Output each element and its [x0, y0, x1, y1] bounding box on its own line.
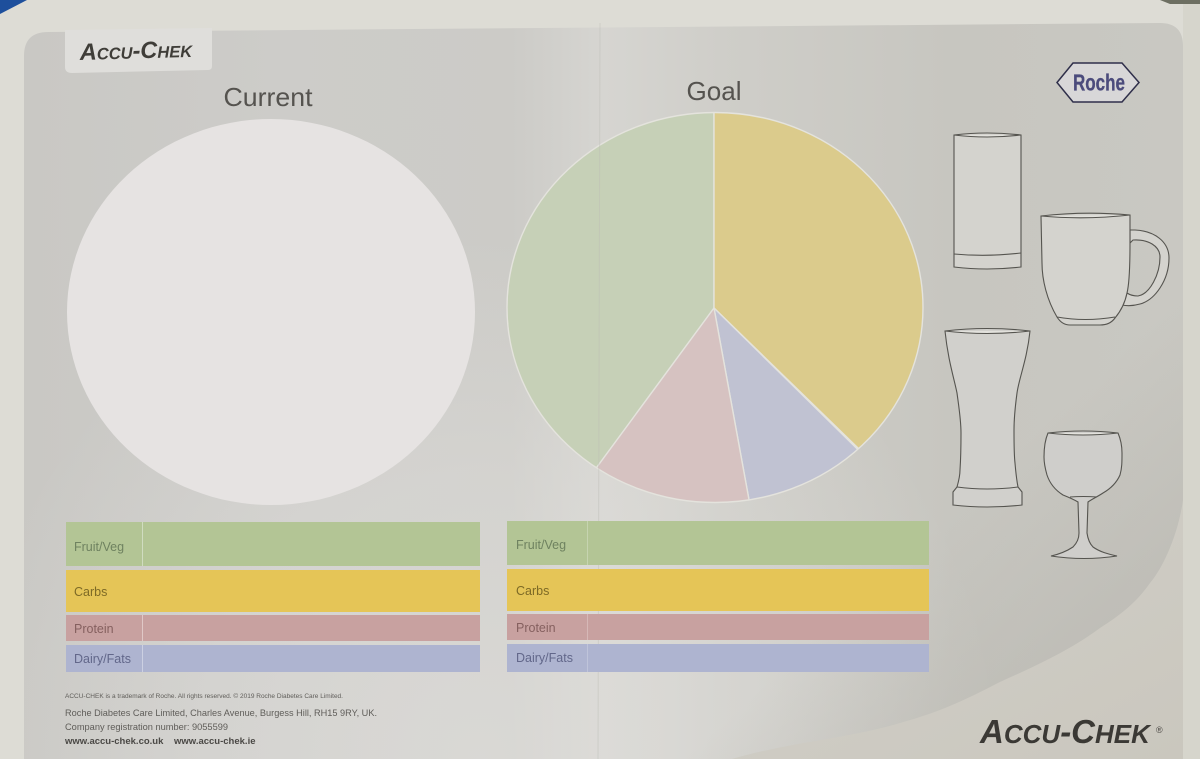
row: carbs: Carbs	[516, 584, 549, 598]
row: protein	[66, 615, 480, 641]
table: current	[66, 522, 480, 672]
roche logo	[1057, 63, 1139, 102]
pie outline	[507, 112, 923, 502]
logo: Accu-Chek bottom right	[979, 713, 1163, 750]
panel: swoosh lower right	[732, 500, 1183, 759]
right page margin	[1183, 0, 1200, 759]
blank plate: current	[67, 119, 475, 505]
row: protein: Protein	[516, 621, 556, 635]
slice: protein	[596, 309, 750, 502]
paper fold	[598, 23, 600, 759]
tab background	[65, 28, 212, 73]
panel: lower lightening	[24, 230, 1183, 759]
row: dairy/fats: Dairy/Fats	[516, 651, 573, 665]
row: fruit/veg: Fruit/Veg	[74, 540, 124, 554]
panel: shaded corner above swoosh	[600, 300, 1183, 759]
slice: dairy/fats	[714, 308, 858, 499]
heading: Current: Current	[224, 82, 313, 112]
web addresses: www.accu-chek.ie	[173, 736, 256, 747]
icon: wine glass	[1044, 431, 1122, 558]
slice: fruit/veg	[508, 114, 713, 466]
web addresses: www.accu-chek.co.uk	[64, 736, 164, 747]
row: fruit/veg	[66, 522, 480, 566]
row: fruit/veg: Fruit/Veg	[516, 538, 566, 552]
wordmark: ACCU-CHEK	[979, 713, 1152, 750]
row: dairy/fats	[66, 645, 480, 672]
row: dairy/fats: Dairy/Fats	[74, 652, 131, 666]
icon: mug	[1041, 213, 1169, 325]
row: carbs	[66, 570, 480, 612]
logo tab: Accu-Chek top	[65, 28, 212, 73]
address line: Roche Diabetes Care Limited, Charles Avenue, Burgess Hill, RH15 9RY, UK.	[65, 708, 377, 719]
row: fruit/veg	[507, 521, 929, 565]
registered mark: ®	[1156, 725, 1163, 735]
row: dairy/fats	[507, 644, 929, 672]
pie chart: goal plate	[506, 112, 924, 503]
icon: tumbler glass	[954, 133, 1021, 269]
logo wordmark: ACCU-CHEK	[78, 36, 194, 65]
heading: Goal: Goal	[686, 76, 742, 106]
hexagon	[1057, 63, 1139, 102]
icon: pint glass	[945, 328, 1030, 507]
page corner: dark backing	[1160, 0, 1200, 4]
slice: carbs	[713, 113, 922, 448]
trademark line: ACCU-CHEK is a trademark of Roche. All rights reserved. © 2019 Roche Diabetes Care Limited.	[65, 692, 343, 700]
row: protein: Protein	[74, 622, 114, 636]
table: goal	[507, 521, 929, 672]
row: protein	[507, 614, 929, 640]
footer text	[64, 692, 377, 747]
page corner: blue backing	[0, 0, 27, 14]
row: carbs: Carbs	[74, 585, 107, 599]
row: carbs	[507, 569, 929, 611]
registration line: Company registration number: 9055599	[65, 722, 228, 733]
wordmark: Roche	[1073, 70, 1125, 96]
